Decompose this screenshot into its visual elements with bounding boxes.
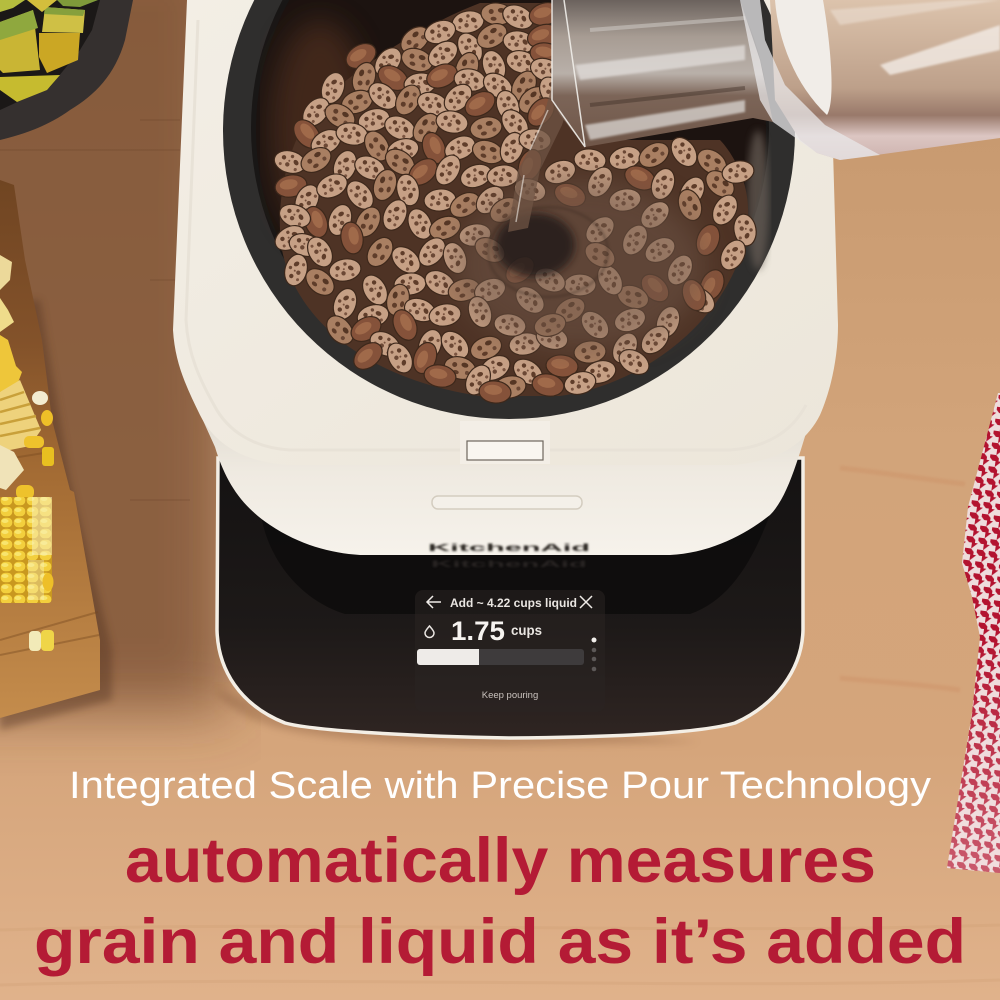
bowl of squash [0, 0, 133, 140]
headline line 2: grain and liquid as it’s added [34, 907, 966, 977]
squash cubes [0, 0, 98, 102]
jug body [770, 0, 1000, 160]
drop icon [425, 626, 434, 638]
page dots [592, 638, 596, 671]
shadow under appliance [215, 690, 700, 746]
measured reading: 1.75 [451, 616, 505, 646]
inner pot rim [223, 0, 795, 419]
lid hinge [460, 421, 550, 464]
benefit headline [34, 826, 966, 977]
loose kernels [29, 630, 54, 651]
front handle recess [432, 496, 582, 509]
corn cob [0, 497, 54, 603]
glass pitcher [552, 0, 1000, 160]
pinto beans [271, 0, 759, 404]
water swirl over beans [455, 180, 705, 350]
jug highlights [880, 25, 1000, 75]
red houndstooth towel [947, 393, 1000, 873]
brand logo: KitchenAid [428, 543, 590, 554]
corn pieces [0, 255, 54, 499]
rice cooker appliance [173, 0, 1000, 746]
lid [173, 0, 838, 465]
close icon [580, 596, 592, 608]
instruction text: Add ~ 4.22 cups liquid [450, 596, 577, 610]
pot interior [256, 0, 766, 393]
logo reflection: KitchenAid [431, 559, 587, 569]
water stream [508, 85, 572, 232]
touchscreen display [415, 590, 605, 712]
scale base with screen [217, 458, 803, 738]
unit label: cups [511, 623, 542, 638]
status message: Keep pouring [482, 690, 538, 701]
appliance body [196, 405, 815, 555]
cutting board [0, 180, 112, 730]
headline line 1: automatically measures [125, 826, 876, 896]
back arrow icon [427, 596, 441, 608]
spout glass [552, 0, 773, 147]
feature subtitle: Integrated Scale with Precise Pour Technology [69, 765, 931, 807]
white rim reflection [775, 0, 832, 115]
progress bar [417, 649, 584, 665]
